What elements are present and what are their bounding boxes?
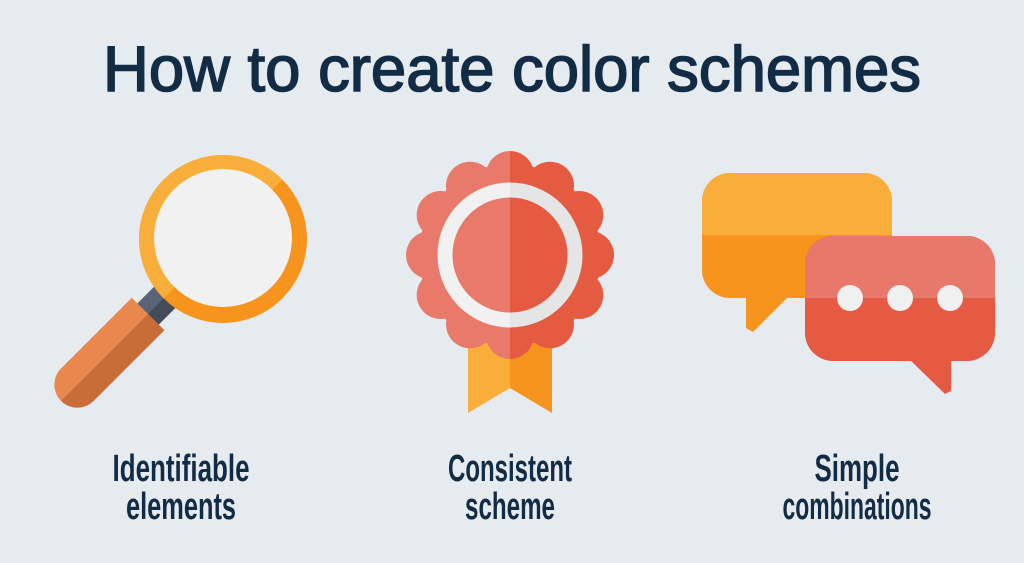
- label: consistent scheme: Consistent: [448, 448, 572, 490]
- label: consistent scheme: scheme: [465, 486, 555, 528]
- label: simple combinations: combinations: [782, 486, 932, 528]
- label: simple combinations: Simple: [814, 448, 900, 490]
- icon: magnifying glass: [45, 155, 307, 417]
- label: identifiable elements: [112, 448, 250, 528]
- label: identifiable elements: elements: [126, 486, 236, 528]
- label: simple combinations: [782, 448, 932, 528]
- icon: award badge: [406, 151, 614, 413]
- label: consistent scheme: [448, 448, 572, 528]
- icon: speech bubbles: [702, 173, 995, 394]
- label: identifiable elements: Identifiable: [112, 448, 250, 490]
- title: How to create color schemes: [103, 33, 921, 105]
